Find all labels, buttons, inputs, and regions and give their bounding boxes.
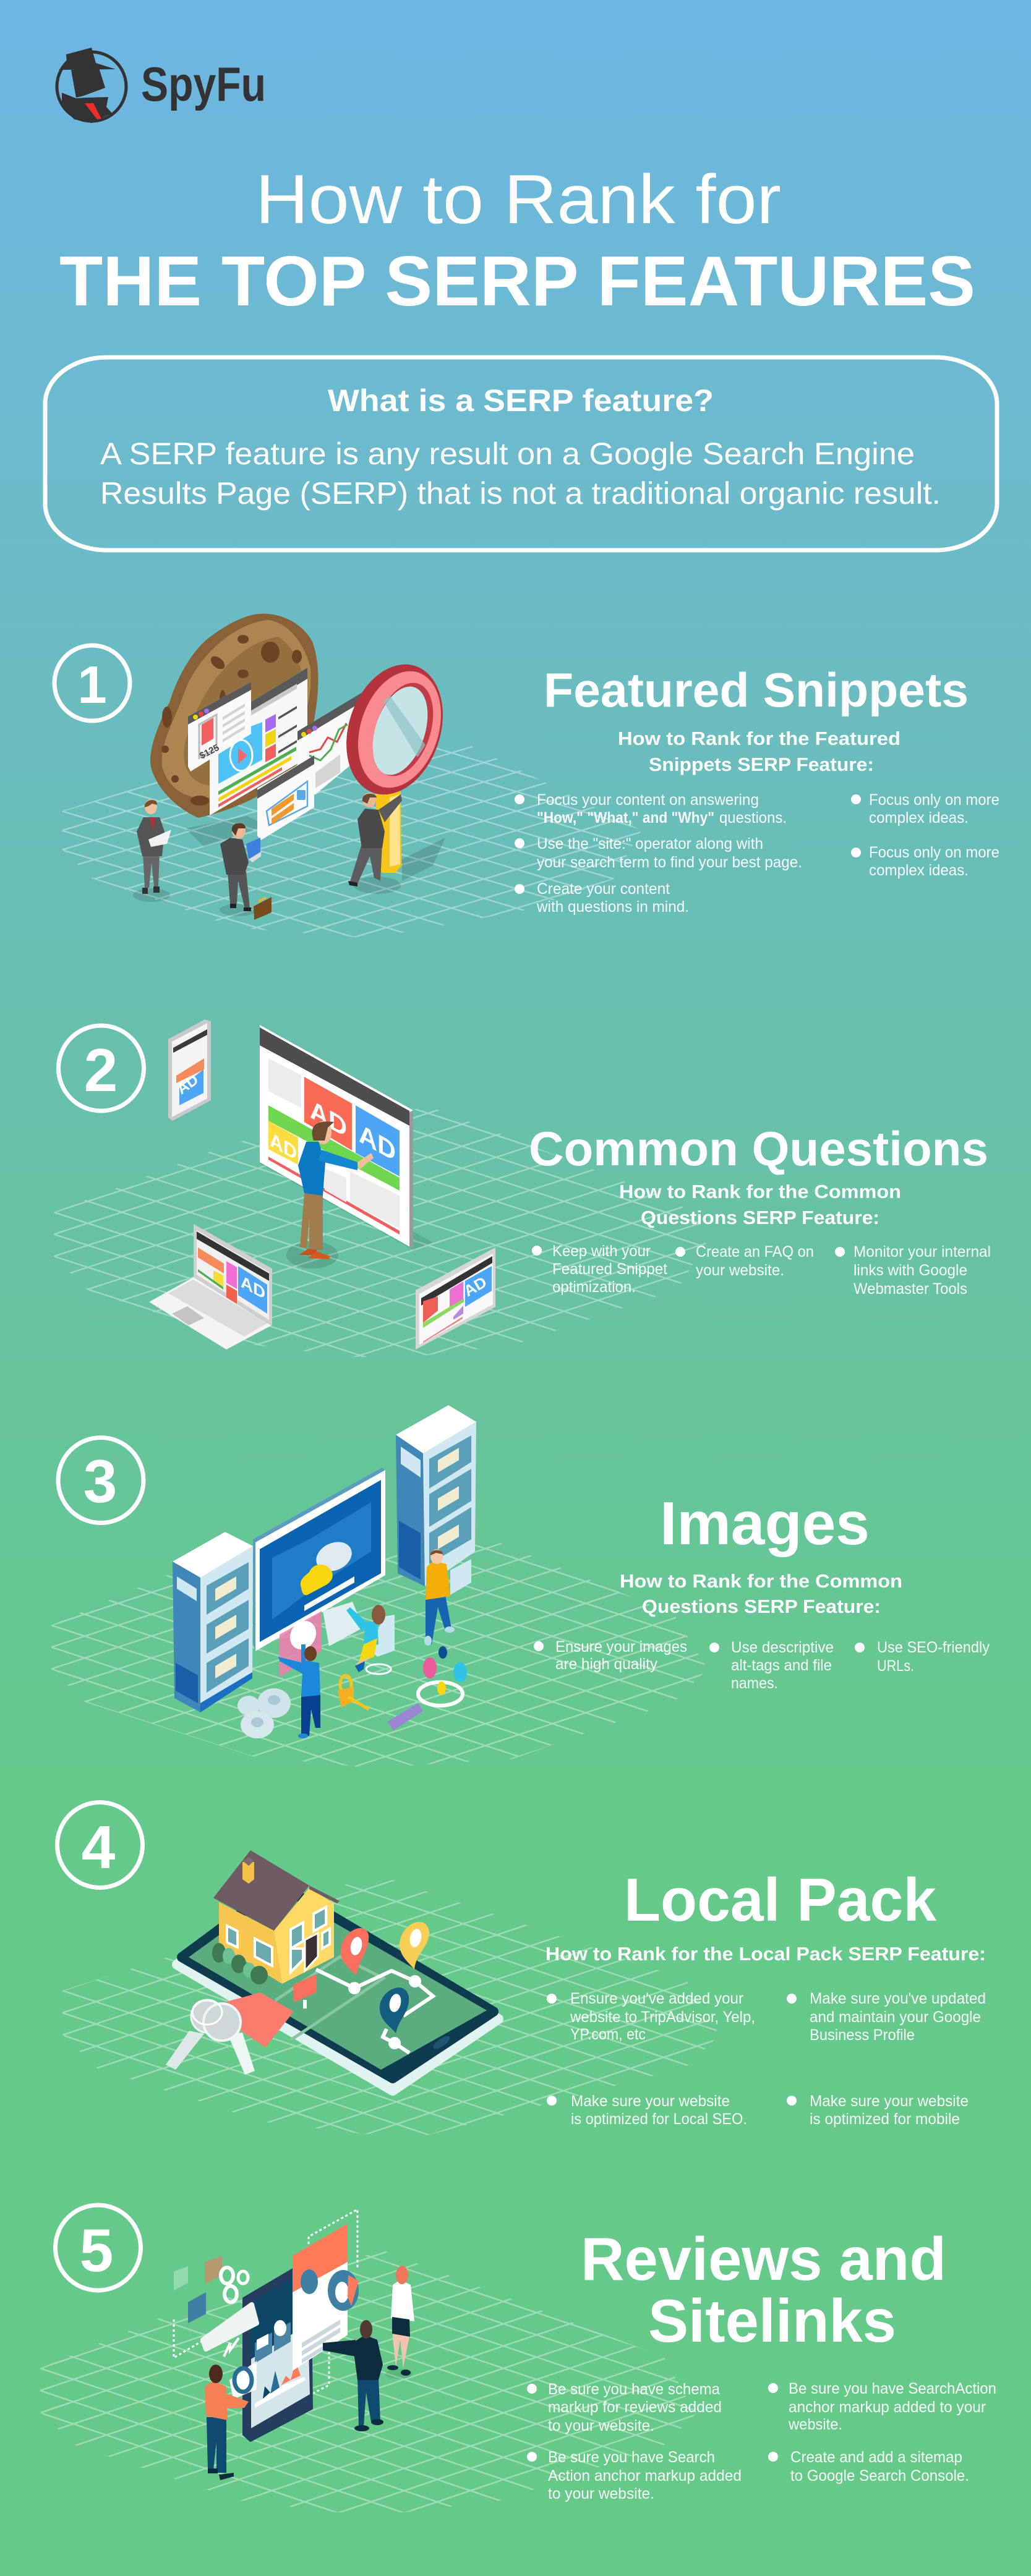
large ad web page: AD xyxy=(359,1118,396,1168)
bullet list 3 xyxy=(534,1638,990,1692)
bullet list 1: Focus only on more xyxy=(869,844,999,861)
number badge 3 xyxy=(58,1438,143,1523)
subheading 1: Snippets SERP Feature: xyxy=(649,754,874,775)
subheading 3 xyxy=(620,1570,902,1617)
bullet list 4: YP.com, etc xyxy=(570,2026,646,2043)
illustration: ad devices xyxy=(149,1019,495,1350)
large ad web page: AD xyxy=(270,1128,297,1165)
number badge 1: 1 xyxy=(77,656,107,715)
chart window xyxy=(297,689,367,797)
businessman with tablet xyxy=(133,799,171,902)
number badge 1 xyxy=(54,645,130,721)
phone with map xyxy=(177,1885,498,2091)
bullet list 2: Featured Snippet xyxy=(552,1260,667,1278)
bullet list 4: Make sure your website xyxy=(810,2093,969,2110)
bullet list 1: complex ideas. xyxy=(869,809,969,827)
bullet list 1: your search term to find your best page. xyxy=(537,854,802,871)
businessman at magnifier xyxy=(348,793,402,894)
bullet list 5: Action anchor markup added xyxy=(548,2467,742,2485)
cookie xyxy=(150,614,318,818)
bullet list 5 xyxy=(527,2380,996,2502)
woman standing xyxy=(385,2266,414,2379)
bullet list 1: Focus your content on answering xyxy=(537,791,759,809)
logo: SpyFu: SpyFu xyxy=(141,57,266,111)
bullet list 5: Create and add a sitemap xyxy=(790,2449,962,2466)
illustration: servers and monitor xyxy=(173,1405,476,1738)
house xyxy=(212,1850,340,1984)
bullet list 2: Monitor your internal xyxy=(853,1243,991,1260)
bullet list 3: names. xyxy=(731,1675,778,1692)
isometric floor grid 2 xyxy=(54,1109,706,1357)
product browser window: $125 xyxy=(198,742,221,762)
product browser window xyxy=(188,682,251,772)
bullet list 1: questions. xyxy=(719,809,787,827)
subheading 1 xyxy=(618,728,901,775)
bullet list 2: Create an FAQ on xyxy=(696,1243,814,1260)
back browser window xyxy=(210,668,307,815)
isometric floor grid 3 xyxy=(51,1543,705,1767)
bullet list 1: "How," "What," and "Why" xyxy=(537,809,714,827)
subheading 3: Questions SERP Feature: xyxy=(642,1596,881,1617)
heading: Images: Images xyxy=(660,1489,870,1557)
bullet list 5: to your website. xyxy=(548,2485,654,2502)
location pins xyxy=(341,1922,429,2033)
bullet list 5: to your website. xyxy=(548,2417,654,2434)
bullet list 3: Use SEO-friendly xyxy=(877,1639,990,1656)
bullet list 1 xyxy=(515,791,999,916)
subheading 3: How to Rank for the Common xyxy=(620,1570,902,1592)
bullet list 5: Be sure you have Search xyxy=(548,2449,715,2466)
bullet list 5: markup for reviews added xyxy=(548,2399,722,2416)
businessman with laptop xyxy=(220,823,261,916)
bullet list 3: are high quality xyxy=(555,1656,657,1673)
magnifying glass xyxy=(330,652,459,873)
number badge 5 xyxy=(56,2205,141,2290)
section 2: common questions xyxy=(54,1019,990,1357)
logo: SpyFu xyxy=(57,48,266,123)
bullet list 4: Ensure you've added your xyxy=(570,1990,743,2007)
for-sale sign xyxy=(293,1974,317,2009)
man in orange sweater xyxy=(205,2365,249,2480)
bullet list 1: complex ideas. xyxy=(869,862,969,879)
heading: Reviews and Sitelinks xyxy=(581,2225,946,2355)
bullet list 5: to Google Search Console. xyxy=(790,2467,969,2485)
bullet list 2: Keep with your xyxy=(552,1243,651,1260)
subheading 2 xyxy=(619,1181,901,1228)
dotted frames xyxy=(174,2209,357,2393)
bullet list 1: Use the "site:" operator along with xyxy=(537,835,763,852)
illustration: phone dashboard with team xyxy=(174,2209,414,2480)
section 1: featured snippets xyxy=(52,613,999,937)
section 3: images xyxy=(51,1405,990,1767)
monitor xyxy=(253,1468,385,1651)
gear card xyxy=(229,2361,257,2399)
isometric floor grid 1 xyxy=(62,746,641,937)
bullet list 3: Ensure your images xyxy=(555,1638,687,1656)
panel: what is a SERP feature: Results Page (SERP) that is not a traditional organic result. xyxy=(100,476,941,511)
section 5: reviews and sitelinks xyxy=(40,2203,996,2512)
number badge 4 xyxy=(57,1803,142,1888)
isometric floor grid 5 xyxy=(40,2251,696,2512)
man pointing at ad xyxy=(286,1121,374,1269)
section 4: local pack xyxy=(55,1800,985,2135)
illustration: house on phone map xyxy=(166,1850,498,2091)
panel: what is a SERP feature: A SERP feature is any result on a Google Search Engine xyxy=(100,436,915,471)
bullet list 1: Focus only on more xyxy=(869,791,999,809)
man at panel xyxy=(278,1644,320,1738)
number badge 5: 5 xyxy=(80,2216,113,2284)
man in yellow xyxy=(424,1549,471,1646)
bullet list 4: Business Profile xyxy=(810,2026,915,2044)
number badge 4: 4 xyxy=(82,1813,115,1881)
bullet list 5: Be sure you have SearchAction xyxy=(789,2380,996,2397)
pink image panel xyxy=(280,1611,322,1677)
bullet list 3: Use descriptive xyxy=(731,1639,834,1656)
subheading 4: How to Rank for the Local Pack SERP Feature: xyxy=(545,1943,986,1965)
panel: what is a SERP feature xyxy=(45,357,997,550)
title line 2: THE TOP SERP FEATURES xyxy=(59,242,975,321)
bullet list 2: links with Google xyxy=(853,1262,967,1279)
tablet: AD xyxy=(461,1273,490,1300)
large ad web page: AD xyxy=(310,1094,347,1144)
subheading 2: How to Rank for the Common xyxy=(619,1181,901,1202)
small magnifier and icons xyxy=(387,1646,467,1730)
tablet xyxy=(416,1248,495,1350)
laptop xyxy=(149,1224,272,1350)
panel: what is a SERP feature: What is a SERP feature? xyxy=(328,383,714,418)
bullet list 5: anchor markup added to your xyxy=(789,2399,986,2416)
isometric floor grid 4 xyxy=(62,1880,717,2135)
bullet list 5: Be sure you have schema xyxy=(548,2381,720,2398)
bullet list 2: optimization. xyxy=(552,1278,636,1296)
number badge 2 xyxy=(58,1026,143,1111)
title line 1: How to Rank for xyxy=(255,161,781,238)
profile dashboard panel xyxy=(293,2224,359,2371)
subheading 2: Questions SERP Feature: xyxy=(641,1207,879,1228)
heading: Reviews and Sitelinks: Reviews and xyxy=(581,2225,946,2293)
bullet list 4: and maintain your Google xyxy=(810,2009,981,2026)
smartphone xyxy=(168,1019,211,1121)
large ad web page xyxy=(260,1025,433,1250)
login window xyxy=(257,755,314,840)
padlock and key xyxy=(338,1675,369,1709)
man in dark jacket xyxy=(323,2320,383,2431)
bullet list 1: Create your content xyxy=(537,880,670,898)
bullet list 4: is optimized for mobile xyxy=(810,2111,960,2128)
heading: Featured Snippets: Featured Snippets xyxy=(544,663,969,717)
floating speech bubble xyxy=(203,2305,257,2357)
left server rack xyxy=(173,1532,253,1712)
keychain and keys xyxy=(166,1992,294,2075)
bullet list 4: is optimized for Local SEO. xyxy=(571,2111,747,2128)
heading: Common Questions: Common Questions xyxy=(529,1121,988,1176)
bullet list 2: Webmaster Tools xyxy=(853,1280,967,1298)
smartphone: AD xyxy=(174,1071,202,1098)
woman on chair xyxy=(346,1605,395,1674)
briefcase xyxy=(254,896,272,920)
bullet list 4: website to TripAdvisor, Yelp, xyxy=(570,2009,755,2026)
laptop: AD xyxy=(241,1272,265,1304)
bullet list 4 xyxy=(547,1990,986,2128)
gears xyxy=(237,1688,291,1738)
bullet list 3: alt-tags and file xyxy=(731,1657,832,1674)
floating squares and gears xyxy=(174,2256,248,2323)
heading: Reviews and Sitelinks: Sitelinks xyxy=(648,2287,896,2355)
bullet list 2 xyxy=(532,1243,991,1298)
illustration: cookie, windows, magnifier xyxy=(133,614,459,920)
bullet list 5: website. xyxy=(788,2416,842,2433)
right server rack xyxy=(396,1405,476,1586)
bullet list 4: Make sure you've updated xyxy=(810,1990,986,2007)
subheading 1: How to Rank for the Featured xyxy=(618,728,901,749)
heading: Local Pack: Local Pack xyxy=(624,1866,936,1934)
bullet list 2: your website. xyxy=(696,1262,784,1279)
number badge 2: 2 xyxy=(84,1036,118,1104)
bullet list 1: with questions in mind. xyxy=(536,898,689,916)
bullet list 3: URLs. xyxy=(877,1657,914,1675)
bullet list 4: Make sure your website xyxy=(571,2093,730,2110)
phone xyxy=(244,2259,312,2441)
number badge 3: 3 xyxy=(83,1447,117,1515)
